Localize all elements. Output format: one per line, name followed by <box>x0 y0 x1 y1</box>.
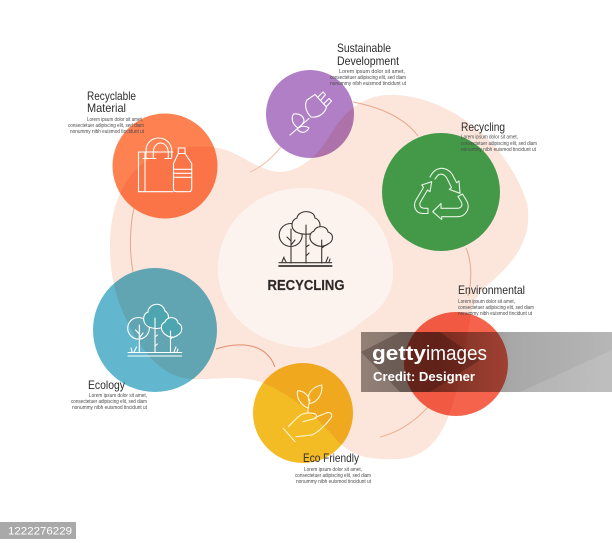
icon: bag and bottle <box>138 138 192 192</box>
label: recycling: nonummy nibh euismod tincidunt ut <box>461 147 537 153</box>
connector: purple to green <box>353 102 418 136</box>
label: recycling: Recycling <box>461 120 505 134</box>
connector: yellow to red <box>380 407 428 437</box>
label: environmental <box>458 283 534 317</box>
label: recycling <box>461 120 537 153</box>
label: recyclable material: nonummy nibh euismod tincidunt ut <box>70 129 145 135</box>
image id tag: 1222276229 <box>8 526 72 538</box>
label: environmental: Environmental <box>458 283 525 297</box>
label: sustainable development: nonummy nibh euismod tincidunt ut <box>330 81 407 87</box>
circle: environmental <box>404 312 508 416</box>
label: sustainable development: consectetuer adipiscing elit, sed diam <box>330 75 406 81</box>
label: ecology: Ecology <box>88 378 125 392</box>
connector: green to red <box>466 248 471 296</box>
icon: recycling arrows <box>415 168 468 220</box>
icon: plug and leaf <box>290 92 332 135</box>
label: eco friendly: consectetuer adipiscing elit, sed diam <box>295 473 371 479</box>
label: eco friendly: Eco Friendly <box>303 451 359 465</box>
label: eco friendly <box>295 451 372 485</box>
connector: teal to yellow <box>216 345 275 367</box>
background blob <box>110 95 528 459</box>
label: sustainable development: Lorem ipsum dolor sit amet, <box>339 69 405 75</box>
label: recyclable material <box>68 89 145 135</box>
label: environmental: consectetuer adipiscing elit, sed diam <box>458 305 534 311</box>
label: eco friendly: nonummy nibh euismod tincidunt ut <box>296 479 372 485</box>
circle: sustainable development <box>266 70 354 158</box>
circle: eco friendly <box>253 363 353 463</box>
label: recyclable material: Recyclable <box>87 89 136 103</box>
image id tag <box>0 522 76 539</box>
label: recyclable material: consectetuer adipiscing elit, sed diam <box>68 123 144 129</box>
center icon: trees <box>279 212 332 266</box>
watermark band: getty <box>372 343 427 365</box>
label: recyclable material: Lorem ipsum dolor sit amet, <box>87 117 143 123</box>
label: sustainable development: Sustainable <box>337 41 391 55</box>
label: eco friendly: Lorem ipsum dolor sit amet, <box>304 467 362 473</box>
label: ecology: nonummy nibh euismod tincidunt ut <box>72 405 148 411</box>
icon: trees <box>128 304 182 356</box>
circle: recycling <box>382 133 500 251</box>
label: environmental: nonummy nibh euismod tincidunt ut <box>458 311 533 317</box>
label: recycling: Lorem ipsum dolor sit amet, <box>461 134 518 140</box>
label: ecology <box>71 378 148 411</box>
circle: ecology <box>93 268 217 392</box>
watermark band <box>361 332 612 392</box>
label: ecology: Lorem ipsum dolor sit amet, <box>89 393 147 399</box>
label: ecology: consectetuer adipiscing elit, sed diam <box>71 399 147 405</box>
icon: hand with sprout <box>283 385 332 442</box>
connector: orange to teal <box>130 208 134 272</box>
center title: RECYCLING <box>268 278 344 294</box>
label: sustainable development <box>330 41 407 87</box>
label: environmental: Lorem ipsum dolor sit amet, <box>458 299 515 305</box>
connector: orange to purple <box>250 147 281 172</box>
label: sustainable development: Development <box>337 54 400 68</box>
central blob <box>218 188 393 348</box>
label: recycling: consectetuer adipiscing elit, sed diam <box>461 141 537 147</box>
label: recyclable material: Material <box>87 101 126 115</box>
circle: recyclable material <box>112 114 218 218</box>
watermark band: images <box>426 343 487 365</box>
watermark band: Credit: Designer <box>373 370 475 384</box>
